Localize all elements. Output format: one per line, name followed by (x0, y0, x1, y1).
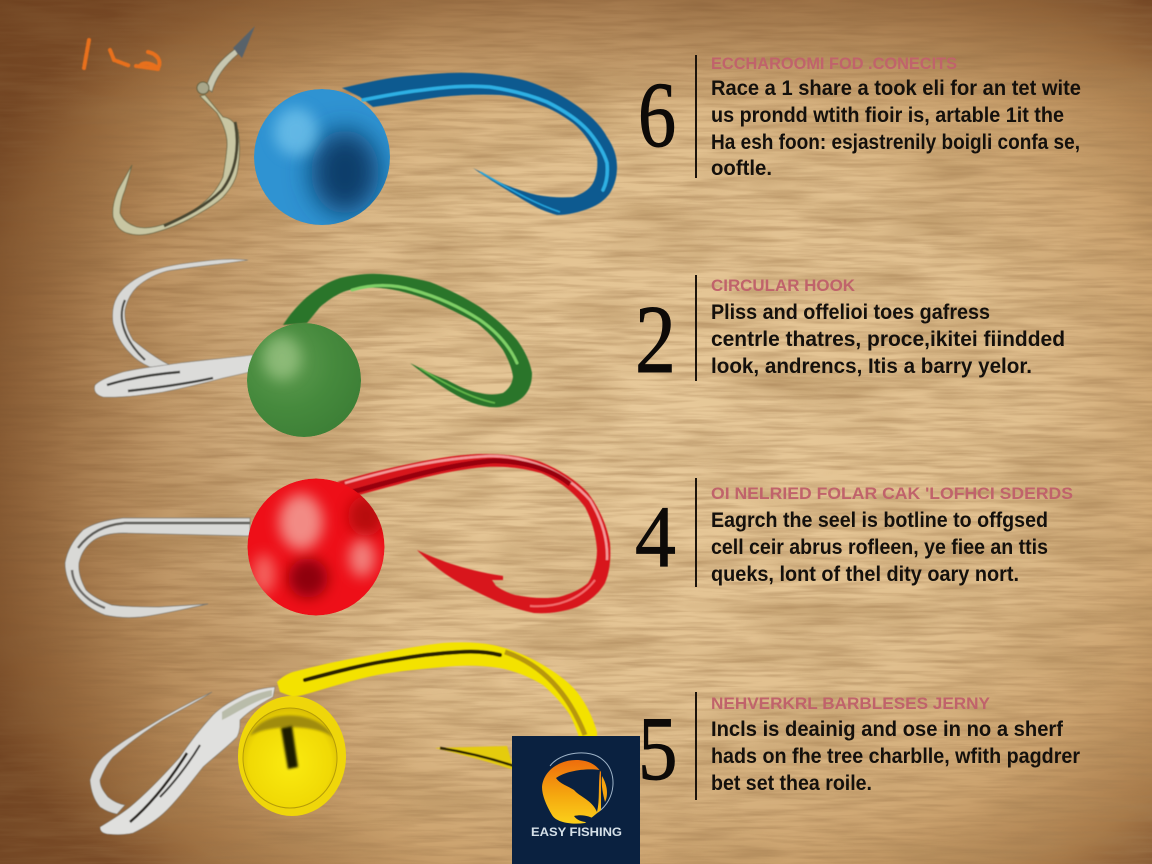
divider 3 (695, 478, 697, 587)
item 4: number and description (638, 692, 1080, 800)
body 4: Incls is deainig and ose in no a sherf (711, 718, 1064, 741)
body 1: us prondd wtith fioir is, artable 1it the (711, 104, 1064, 127)
body 3: Eagrch the seel is botline to offgsed (711, 509, 1048, 532)
red wire hook (337, 454, 610, 613)
blue ball (254, 89, 390, 225)
heading 3: OI NELRIED FOLAR CAK 'LOFHCI SDERDS (711, 484, 1073, 503)
heading 4: NEHVERKRL BARBLESES JERNY (711, 694, 991, 713)
yellow ball (238, 696, 346, 816)
body 2: look, andrencs, Itis a barry yelor. (711, 355, 1032, 378)
yellow wire hook (277, 642, 597, 770)
hook 4: yellow ball hook with silver hook (90, 642, 597, 835)
red ball (248, 478, 384, 616)
body 1 (711, 77, 1081, 180)
number 5: 5 (638, 699, 678, 799)
hook 2: green ball hook with silver hook (94, 259, 532, 437)
divider 1 (695, 55, 697, 178)
green wire hook (283, 274, 532, 407)
heading 2: CIRCULAR HOOK (711, 276, 856, 295)
olive-silver hook (113, 26, 255, 235)
body 4: hads on fhe tree charblle, wfith pagdrer (711, 745, 1080, 768)
heading 1: ECCHAROOMI FOD .CONECITS (711, 54, 957, 73)
body 2 (711, 301, 1065, 378)
body 3: cell ceir abrus rofleen, ye fiee an ttis (711, 536, 1048, 559)
hook 3: red ball hook with silver hook (65, 454, 610, 618)
blue wire hook (342, 73, 617, 215)
number 6: 6 (638, 64, 676, 167)
divider 2 (695, 275, 697, 381)
body 1: Ha esh foon: esjastrenily boigli confa se, (711, 131, 1080, 154)
body 2: centrle thatres, proce,ikitei fiindded (711, 328, 1065, 351)
orange scribble mark (84, 40, 160, 69)
logo ring (550, 753, 613, 812)
silver hook (94, 259, 253, 397)
item 3: number and description (635, 478, 1073, 587)
body 4: bet set thea roile. (711, 772, 872, 795)
body 2: Pliss and offelioi toes gafress (711, 301, 990, 324)
body 1: ooftle. (711, 157, 772, 180)
logo wordmark: EASY FISHING (531, 827, 622, 839)
body 4 (711, 718, 1080, 795)
hook 1: blue ball hook with olive-silver hook (113, 26, 617, 235)
item 1: number and description (638, 54, 1081, 180)
body 3 (711, 509, 1048, 586)
number 4: 4 (635, 488, 676, 586)
number 2: 2 (635, 286, 676, 394)
item 2: number and description (635, 275, 1065, 394)
body 1: Race a 1 share a took eli for an tet wite (711, 77, 1081, 100)
logo fish emblem (542, 760, 607, 824)
silver double hook (90, 687, 275, 835)
green ball (247, 323, 361, 437)
logo: Easy Fishing (512, 736, 640, 864)
silver hook (65, 518, 250, 618)
body 3: queks, lont of thel dity oary nort. (711, 563, 1019, 586)
divider 4 (695, 692, 697, 800)
